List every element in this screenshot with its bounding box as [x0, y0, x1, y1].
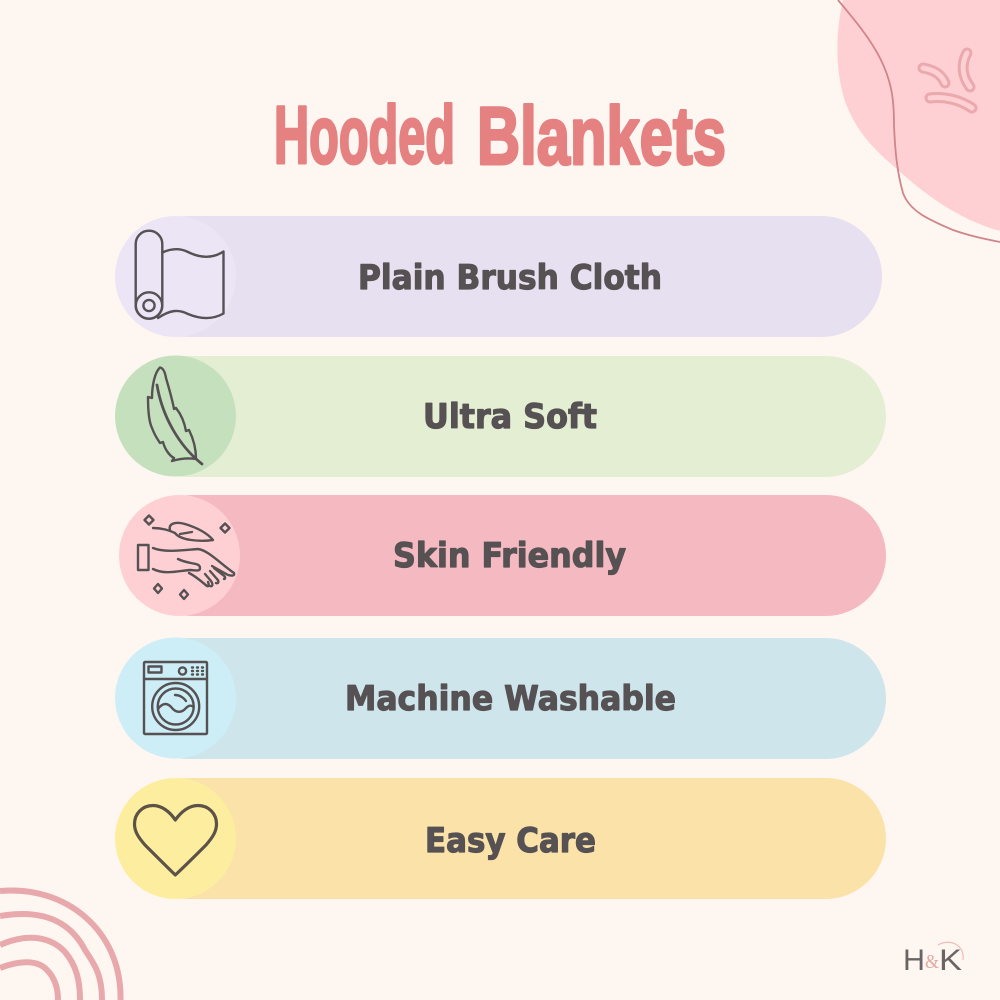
row: ultra soft [115, 356, 886, 477]
title [274, 90, 726, 182]
pill background [128, 638, 886, 759]
icon circle [115, 216, 236, 337]
title: Hooded [274, 90, 455, 181]
icon: fabric roll [136, 231, 224, 319]
decorative rainbow arcs, bottom left [0, 890, 121, 1000]
label: Plain Brush Cloth [358, 258, 662, 298]
label: Easy Care [425, 821, 596, 861]
title: Blankets [477, 91, 726, 182]
pill background [128, 216, 882, 337]
logo: H&K: & [925, 951, 939, 973]
logo: H&K: K [939, 944, 962, 977]
icon circle [115, 778, 236, 899]
logo: H&K: H [903, 944, 925, 977]
icon circle [115, 638, 236, 758]
row: machine washable [115, 638, 886, 759]
row: skin friendly [119, 495, 886, 616]
label: Ultra Soft [423, 397, 597, 437]
label: Machine Washable [345, 679, 676, 719]
icon: heart [134, 806, 216, 875]
row: plain brush cloth [115, 216, 882, 337]
icon circle [119, 495, 240, 616]
pill background [128, 356, 886, 477]
icon circle [115, 356, 236, 476]
row: easy care [115, 778, 886, 899]
icon: hand with feather [138, 516, 234, 599]
icon: feather [148, 368, 202, 464]
label: Skin Friendly [393, 536, 626, 576]
decorative pink blob, top right [837, 0, 1000, 242]
pill background [128, 778, 886, 899]
logo: H&K [903, 942, 963, 977]
icon: washing machine [144, 662, 207, 734]
pill background [132, 495, 886, 616]
